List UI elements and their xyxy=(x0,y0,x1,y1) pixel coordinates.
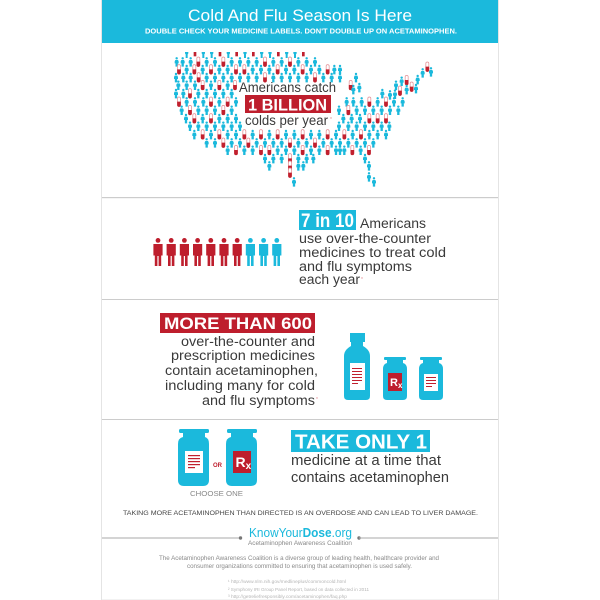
logo: KnowYourDose.org: KnowYourDose.org xyxy=(249,525,352,540)
label: choose one: CHOOSE ONE xyxy=(190,489,243,498)
stat text: contain acetaminophen, xyxy=(165,363,318,378)
divider 2 xyxy=(102,299,498,300)
footnotes xyxy=(228,579,369,599)
stat text: and flu symptoms xyxy=(202,393,315,408)
footnotes: ¹ http://www.nlm.nih.gov/medlineplus/commoncold.html xyxy=(228,579,346,584)
logo: KnowYourDose.org: Acetaminophen Awareness Coalition xyxy=(248,541,352,547)
panel: more than 600 xyxy=(160,313,443,408)
panel: page frame xyxy=(102,0,498,600)
stat text: medicines to treat cold xyxy=(299,245,446,260)
coalition description xyxy=(159,555,440,570)
warning text: TAKING MORE ACETAMINOPHEN THAN DIRECTED IS AN OVERDOSE AND CAN LEAD TO LIVER DAMAGE. xyxy=(123,510,478,517)
stat text: MORE THAN 600 xyxy=(164,314,312,333)
footnotes: ³ http://getreliefresponsibly.com/acetaminophen/faq.php xyxy=(228,594,347,599)
panel: take only 1 xyxy=(178,429,449,498)
icon: Rx bottle xyxy=(383,357,407,400)
east side xyxy=(357,83,361,92)
coalition description: The Acetaminophen Awareness Coalition is a diverse group of leading health, healthcare provider and xyxy=(159,555,440,562)
stat text xyxy=(299,210,446,287)
callout: 1 billion colds: colds per year xyxy=(245,113,328,128)
subtitle: DOUBLE CHECK YOUR MEDICINE LABELS. DON'T DOUBLE UP ON ACETAMINOPHEN. xyxy=(145,28,457,36)
stat text: and flu symptoms xyxy=(299,259,412,274)
icon: OTC bottle, choose one xyxy=(178,429,209,486)
icon: Rx bottle, choose one: x xyxy=(246,461,252,472)
title: Cold And Flu Season Is Here xyxy=(188,6,412,25)
icon: Rx bottle: x xyxy=(398,381,403,390)
stat text xyxy=(291,430,449,486)
icon: tall liquid bottle xyxy=(344,333,370,400)
stat text: 7 in 10 xyxy=(301,211,354,232)
stat text: each year xyxy=(299,272,361,287)
logo: KnowYourDose.org xyxy=(248,525,352,547)
icon: Rx bottle, choose one: R xyxy=(236,454,246,470)
footer divider xyxy=(102,536,498,540)
callout: 1 billion colds: Americans catch xyxy=(239,80,336,95)
coalition description: consumer organizations committed to ensuring that acetaminophen is used safely. xyxy=(187,563,412,570)
stat text: over-the-counter and xyxy=(181,334,315,349)
stat text: including many for cold xyxy=(165,378,315,393)
divider 3 xyxy=(102,419,498,420)
icon: OTC bottle xyxy=(419,357,443,400)
stat text: contains acetaminophen xyxy=(291,470,449,486)
divider 1 xyxy=(102,197,498,198)
label: or: OR xyxy=(213,462,222,469)
callout: 1 billion colds xyxy=(239,80,336,128)
stat text: medicine at a time that xyxy=(291,453,441,469)
callout: 1 billion colds: 1 BILLION xyxy=(248,96,327,114)
icon: row of ten people xyxy=(153,238,281,266)
stat text: prescription medicines xyxy=(171,348,315,363)
stat text: Americans xyxy=(360,216,426,231)
footnotes: ² Symphony IRI Group Panel Report, based on data collected in 2011 xyxy=(228,587,369,592)
stat text xyxy=(160,313,318,408)
icon: Rx bottle, choose one xyxy=(226,429,257,486)
panel: 7 in 10 xyxy=(153,210,446,287)
stat text: TAKE ONLY 1 xyxy=(295,432,427,454)
chart: US map made of people xyxy=(174,52,433,187)
stat text: use over-the-counter xyxy=(299,231,432,246)
icon: Rx bottle: R xyxy=(390,377,398,389)
header banner xyxy=(102,0,498,43)
